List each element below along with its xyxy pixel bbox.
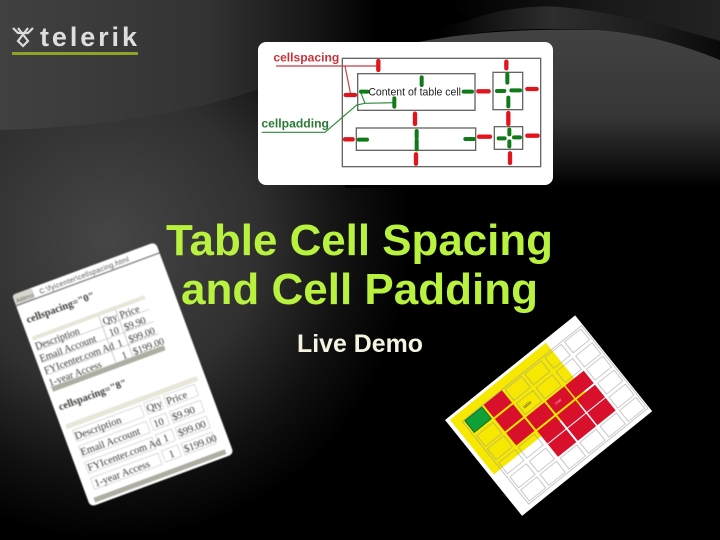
table: cellspacing 0: 1-year Access	[47, 360, 104, 389]
panel: browser screenshot of cellspacing tables	[12, 242, 234, 507]
table: cellspacing 8: $9.90	[171, 405, 197, 424]
cell labels: table	[522, 399, 533, 409]
label: content of table cell: Content of table cell	[368, 86, 461, 98]
table: cellspacing 0: 1	[120, 350, 129, 362]
table: cellspacing 8: 1	[168, 449, 176, 461]
table: cellspacing 0: Description	[34, 326, 81, 353]
title: and Cell Padding	[181, 265, 538, 314]
table: cellspacing 8: Price	[165, 390, 189, 408]
label: cellpadding: cellpadding	[261, 116, 329, 130]
table: cellspacing 8: Qty	[145, 399, 165, 415]
logo: telerik	[12, 22, 138, 55]
table: cellspacing 8: cellspacing="8"	[57, 378, 129, 413]
green cell	[465, 407, 491, 432]
table: cellspacing 0: Qty	[101, 312, 119, 328]
table: cellspacing 8: 10	[152, 417, 166, 430]
title: Table Cell Spacing	[166, 216, 553, 265]
grid cells	[462, 326, 648, 504]
yellow highlight	[450, 343, 590, 474]
table: cellspacing 8	[57, 354, 226, 503]
icon: telerik mark	[13, 28, 33, 46]
address bar	[12, 242, 160, 306]
table: cellspacing 0	[24, 274, 167, 392]
table: cellspacing 8: FYIcenter.com Ad	[86, 437, 163, 474]
table: cellspacing 0: $199.00	[132, 336, 166, 358]
table: cellspacing 0: 1	[116, 338, 124, 350]
address bar: Address	[16, 292, 35, 305]
address bar: C:\fyicenter\cellspacing.html	[39, 256, 131, 296]
panel: cell spacing and padding diagram	[258, 42, 553, 185]
logo wordmark: telerik	[40, 22, 138, 52]
table: cellspacing 0: $9.90	[123, 316, 148, 334]
label: cellspacing: cellspacing	[273, 51, 339, 65]
cell labels: row	[554, 397, 563, 406]
table: cellspacing 0: cellspacing="0"	[25, 291, 96, 326]
logo underline	[12, 52, 138, 55]
table: cellspacing 0: FYIcenter.com Ad	[43, 341, 116, 377]
table: cellspacing 8: 1	[162, 433, 171, 445]
table: cellspacing 0: Email Account	[38, 334, 98, 365]
panel: colored table grid	[445, 315, 652, 516]
table: cellspacing 8: $199.00	[183, 433, 219, 455]
table: cellspacing 8: 1-year Access	[93, 459, 152, 490]
table: cellspacing 0: 10	[108, 325, 121, 339]
table: cellspacing 8: Description	[73, 415, 124, 443]
cell labels	[522, 384, 563, 423]
subtitle: live demo: Live Demo	[297, 330, 423, 358]
red cells	[484, 343, 616, 473]
table: cellspacing 8: $99.00	[177, 419, 208, 439]
title	[166, 216, 553, 314]
table: cellspacing 8: Email Account	[79, 426, 142, 458]
table: cellspacing 0: $99.00	[127, 326, 157, 346]
table: cellspacing 0: Price	[118, 304, 142, 321]
diagram content	[261, 51, 541, 167]
